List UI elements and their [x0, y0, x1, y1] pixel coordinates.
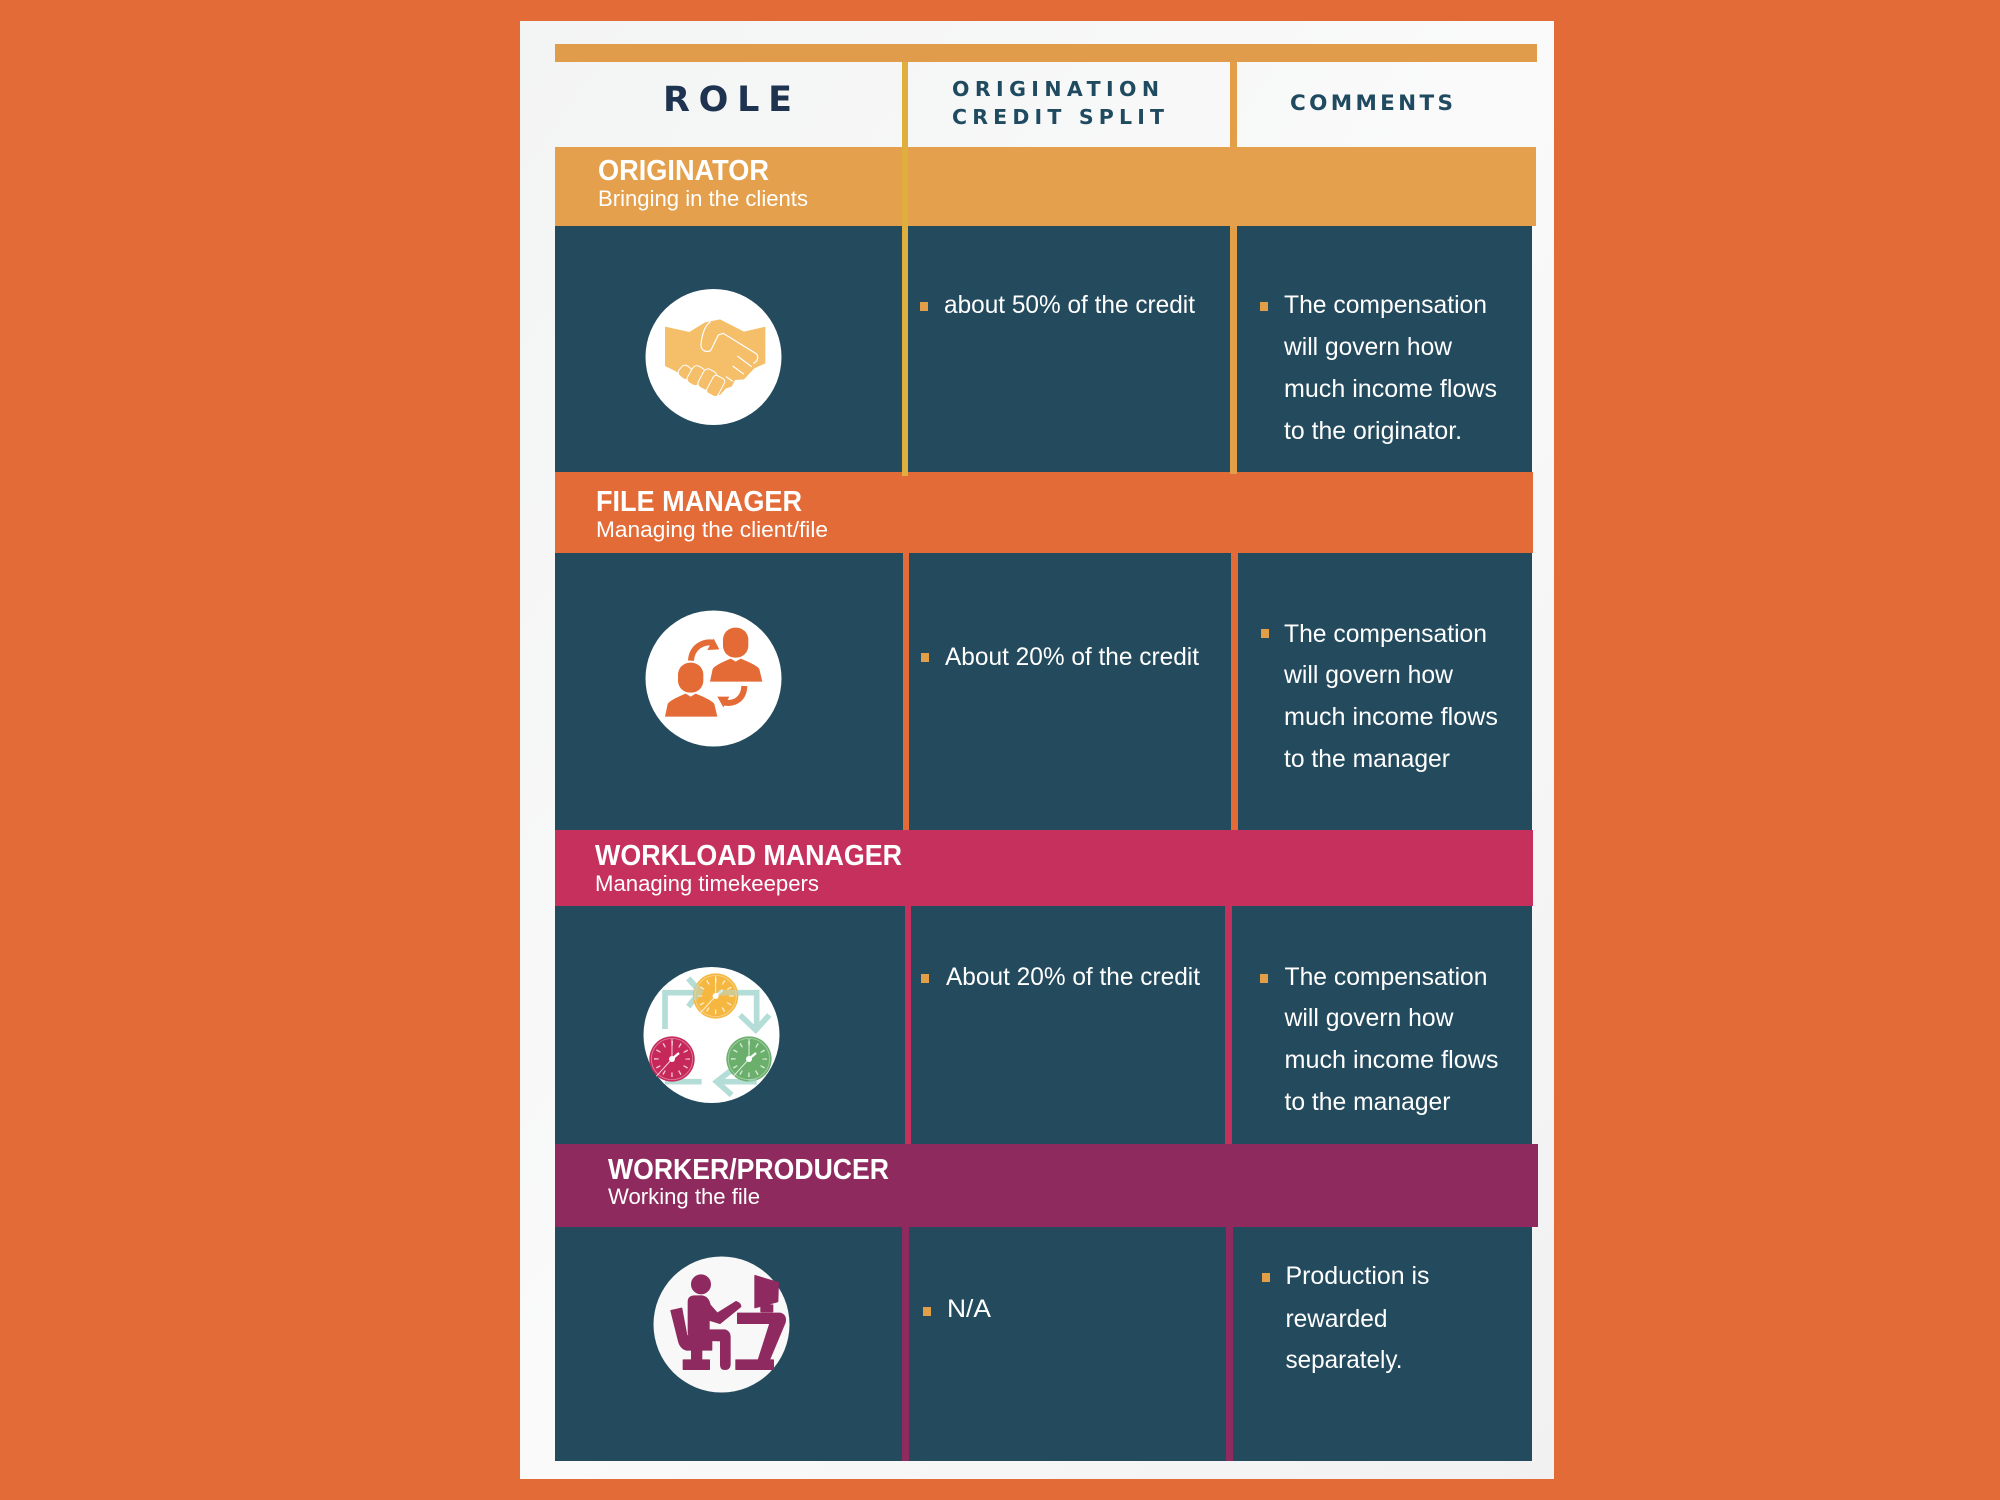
comment text: worker/producer [1262, 1262, 1430, 1374]
band: workload manager: Managing timekeepers [595, 871, 819, 896]
divider: file manager comments column [1231, 553, 1238, 830]
comment text: file manager: much income flows [1284, 703, 1498, 731]
column heading: origination credit split: CREDIT SPLIT [952, 105, 1164, 129]
panel: white card [520, 21, 1554, 1479]
panel: file manager row [555, 472, 1533, 830]
column heading: role: ROLE [663, 80, 792, 120]
comment text: file manager [1261, 620, 1498, 773]
band: workload manager: WORKLOAD MANAGER [595, 840, 902, 872]
divider: originator comments column [1230, 62, 1237, 474]
band: file manager [555, 472, 1533, 553]
comment text: originator: to the originator. [1284, 417, 1462, 445]
divider: originator credit column [902, 62, 908, 476]
band: file manager: FILE MANAGER [596, 486, 802, 518]
panel: originator row [555, 62, 1536, 476]
credit text: worker/producer: N/A [947, 1295, 991, 1323]
row body: originator [555, 226, 1532, 472]
comment text: workload manager [1260, 963, 1498, 1116]
comment text: originator [1260, 291, 1497, 445]
comment text: worker/producer: Production is [1286, 1262, 1430, 1290]
comment text: originator: The compensation [1284, 291, 1487, 319]
column heading: origination credit split: ORIGINATION [952, 77, 1159, 101]
band: worker/producer: WORKER/PRODUCER [608, 1154, 889, 1186]
icon: handshake [646, 289, 782, 425]
band: originator: ORIGINATOR [598, 155, 769, 187]
band: workload manager [555, 830, 1533, 906]
column heading: origination credit split [952, 77, 1164, 129]
comment text: file manager: to the manager [1284, 745, 1450, 773]
header: top accent bar [555, 44, 1537, 62]
credit text: file manager: About 20% of the credit [945, 643, 1199, 671]
icon: worker at desk [654, 1256, 790, 1392]
credit text: originator: about 50% of the credit [944, 291, 1195, 319]
divider: worker comments column [1226, 1227, 1233, 1461]
row body: workload manager [555, 906, 1532, 1144]
icon: people exchange [646, 610, 782, 746]
band: worker/producer [555, 1144, 1538, 1227]
comment text: originator: much income flows [1284, 375, 1497, 403]
comment text: workload manager: will govern how [1284, 1004, 1454, 1032]
comment text: workload manager: to the manager [1284, 1088, 1450, 1116]
comment text: worker/producer: rewarded [1286, 1305, 1388, 1333]
comment text: worker/producer: separately. [1286, 1346, 1402, 1374]
divider: workload comments column [1225, 906, 1232, 1144]
credit text: worker/producer [923, 1295, 991, 1323]
divider: file manager credit column [903, 553, 909, 830]
comment text: workload manager: much income flows [1284, 1046, 1498, 1074]
comment text: workload manager: The compensation [1284, 963, 1488, 991]
band: file manager: Managing the client/file [596, 517, 828, 542]
divider: workload credit column [905, 906, 911, 1144]
divider: worker credit column [902, 1227, 909, 1461]
band: originator: Bringing in the clients [598, 186, 808, 211]
comment text: file manager: will govern how [1283, 661, 1454, 689]
credit text: workload manager: About 20% of the credit [946, 963, 1200, 991]
band: originator [555, 147, 1536, 226]
comment text: file manager: The compensation [1284, 620, 1487, 648]
row body: file manager [555, 553, 1532, 830]
row body: worker/producer [555, 1227, 1532, 1461]
panel: worker/producer row [555, 1144, 1538, 1461]
comment text: originator: will govern how [1283, 333, 1453, 361]
column heading: comments: COMMENTS [1290, 91, 1453, 116]
panel: workload manager row [555, 830, 1533, 1144]
band: worker/producer: Working the file [608, 1184, 760, 1209]
icon: cycling clocks [644, 967, 780, 1103]
